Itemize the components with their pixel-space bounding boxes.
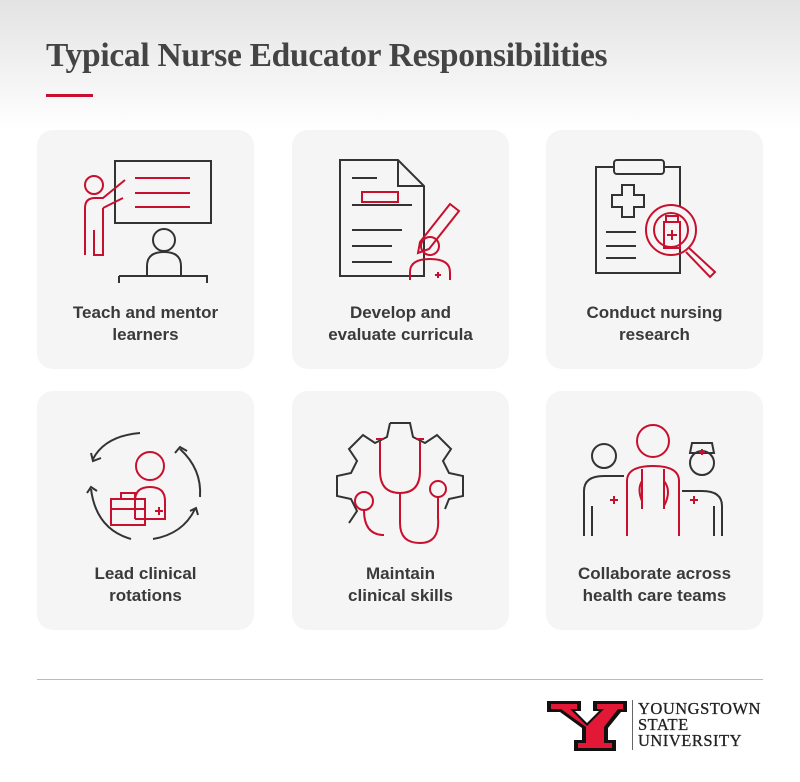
label: Collaborate across xyxy=(578,564,731,583)
logo text: YOUNGSTOWN xyxy=(638,699,761,718)
logo text: STATE xyxy=(638,715,689,734)
panel: skills xyxy=(292,391,509,630)
title: Typical Nurse Educator Responsibilities xyxy=(46,37,607,74)
label: learners xyxy=(112,325,179,344)
label: Lead clinical xyxy=(94,564,197,583)
label: clinical skills xyxy=(348,586,453,605)
label: research xyxy=(619,325,690,344)
label xyxy=(328,303,473,344)
icon: gear stethoscope xyxy=(336,422,464,544)
label: Maintain xyxy=(366,564,435,583)
panel: teach xyxy=(37,130,254,369)
panel: research xyxy=(546,130,763,369)
icon: clipboard magnifier xyxy=(595,159,716,278)
label xyxy=(94,564,197,605)
label: health care teams xyxy=(583,586,726,605)
icon: teacher xyxy=(84,160,212,283)
icon: document and pencil xyxy=(339,159,460,280)
icon: rotation xyxy=(86,432,202,540)
label: Develop and xyxy=(350,303,451,322)
panel: collaborate xyxy=(546,391,763,630)
label: rotations xyxy=(109,586,182,605)
panel: develop xyxy=(292,130,509,369)
logo text xyxy=(638,699,761,750)
logo xyxy=(547,699,761,751)
accent line xyxy=(46,94,93,97)
logo text: UNIVERSITY xyxy=(638,731,742,750)
panel: rotations xyxy=(37,391,254,630)
label xyxy=(73,303,218,344)
label xyxy=(586,303,722,344)
icon: Y xyxy=(547,701,627,751)
label: Teach and mentor xyxy=(73,303,218,322)
label: evaluate curricula xyxy=(328,325,473,344)
icon: team xyxy=(583,424,723,536)
label xyxy=(578,564,731,605)
label: Conduct nursing xyxy=(586,303,722,322)
label xyxy=(348,564,453,605)
